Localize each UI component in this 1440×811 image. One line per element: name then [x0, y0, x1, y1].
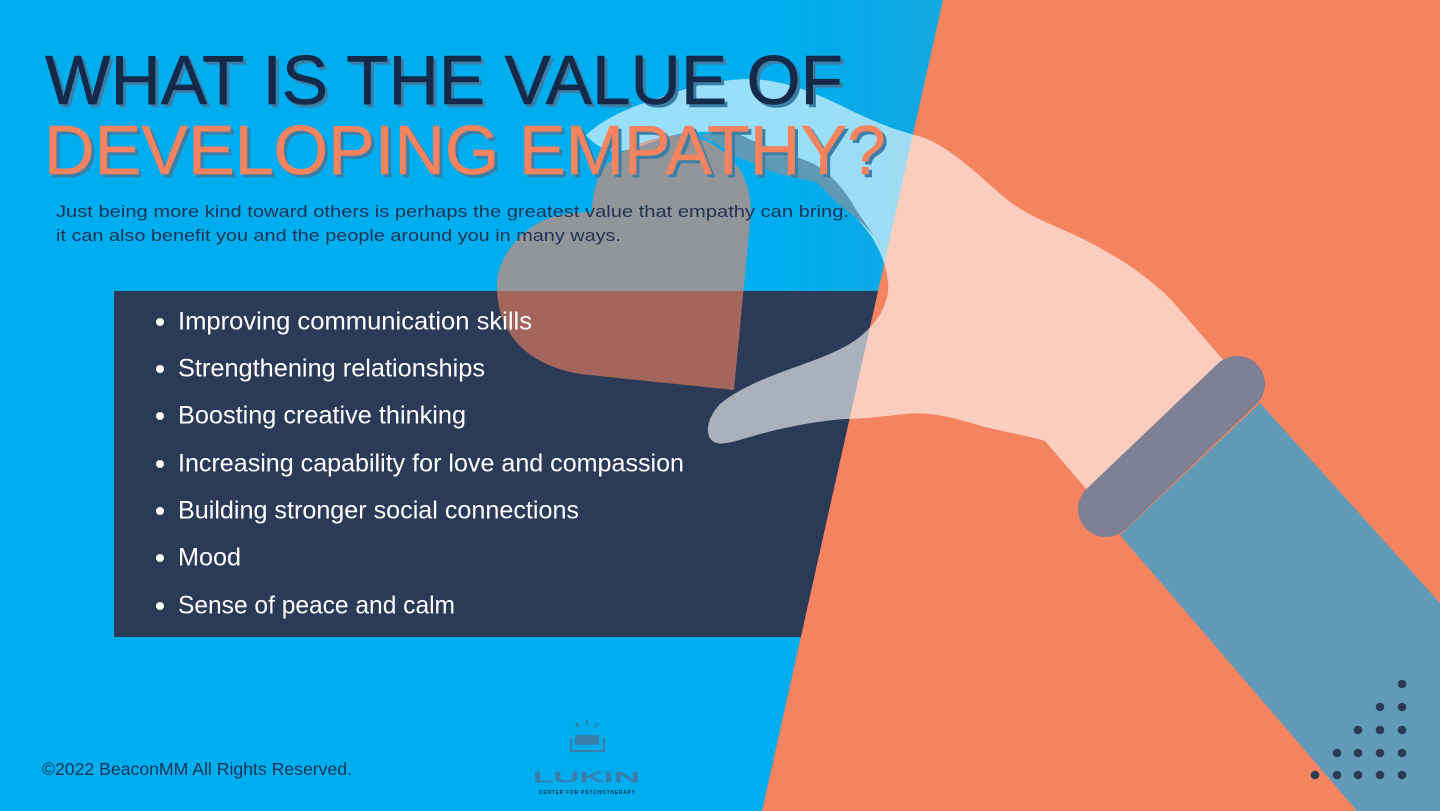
hand shadow band: [700, 132, 874, 236]
list item 4: Increasing capability for love and compassion: [178, 450, 684, 478]
title line 1: WHAT IS THE VALUE OF: [45, 41, 843, 119]
panel: orange diagonal background: [762, 0, 1440, 811]
list item 6: Mood: [178, 544, 241, 572]
list item 1: Improving communication skills: [178, 308, 532, 336]
logo: Lukin Center for Psychotherapy: [533, 720, 640, 796]
logo tagline: CENTER FOR PSYCHOTHERAPY: [539, 790, 636, 796]
wristband: [1106, 384, 1237, 509]
panel: benefits list background: [114, 291, 894, 637]
intro text: Just being more kind toward others is perhaps the greatest value that empathy can bring.: [56, 202, 849, 221]
illustration: hand holding heart: [497, 79, 1440, 811]
title: [44, 41, 886, 189]
sleeve: [1120, 403, 1440, 811]
list item 2: Strengthening relationships: [178, 354, 485, 382]
dot pattern: [1311, 680, 1406, 779]
copyright: ©2022 BeaconMM All Rights Reserved.: [42, 759, 352, 779]
title line 2: DEVELOPING EMPATHY?: [44, 111, 886, 189]
intro text: it can also benefit you and the people around you in many ways.: [56, 226, 621, 245]
intro text: [56, 202, 849, 245]
list item 7: Sense of peace and calm: [178, 592, 455, 620]
heart: [497, 135, 751, 390]
logo name: LUKIN: [533, 769, 640, 786]
hand: [586, 79, 1240, 510]
icon: sofa with rays: [571, 720, 604, 751]
benefits list: [156, 308, 684, 620]
list item 3: Boosting creative thinking: [178, 402, 466, 430]
list item 5: Building stronger social connections: [178, 496, 579, 524]
